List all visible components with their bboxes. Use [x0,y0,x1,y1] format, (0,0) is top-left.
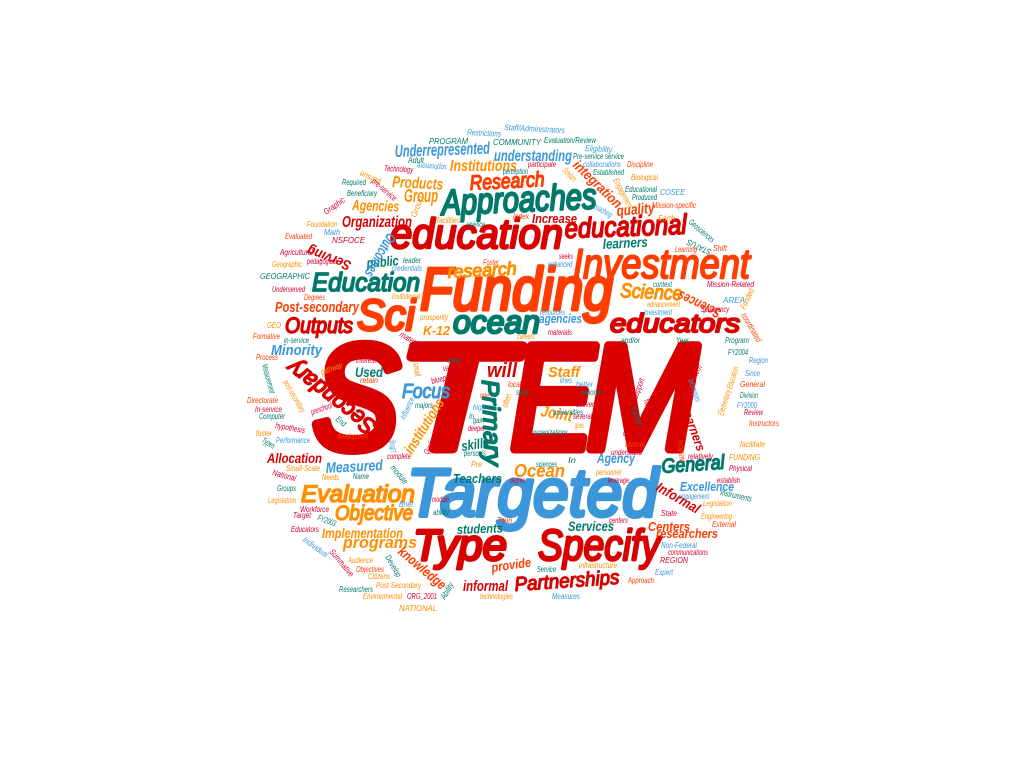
small words: top: Graphic [321,194,347,217]
small words: middle left: Legislation [268,495,296,505]
small words: top: Earth [658,213,675,223]
small words: middle left: often [499,392,514,409]
small words: top: Biological [631,172,659,182]
small words: middle left: Name [353,471,369,481]
word: educational: educational [564,209,688,244]
small words: top: Geosciences [687,217,717,245]
medium words: students [457,520,503,537]
small words: middle right: national [580,387,603,397]
small words: middle right: Region [749,355,768,365]
small words: middle right: better [576,379,594,389]
small words: middle right: FY2004 [728,347,748,357]
small words: top: sophomore [416,161,447,173]
small words: middle left: Groups [277,483,297,493]
small words: middle right: capacity [623,428,646,438]
small words: middle left: module [388,463,410,486]
small words: top: Technology [384,163,414,175]
medium words: Organization [342,214,412,231]
small words: bottom: Develop [383,553,404,579]
small words: top: Staff/Administrators [504,122,566,135]
small words: middle left: post-secondary [281,377,308,415]
small words: top [285,122,728,257]
small words: bottom: Objectives [356,564,385,574]
small words: middle right: advancement [647,299,680,309]
small words: middle left: Underserved [272,284,305,294]
small words: middle right: relatively [688,451,714,461]
medium words: Outcomes [361,230,399,280]
small words: top: Mission-specific [652,200,697,210]
small words: bottom: Train [497,515,512,525]
small words: middle right: Year [676,335,690,345]
small words: middle right: coordinated [739,311,764,344]
small words: middle left: foster [256,428,273,438]
small words: bottom: communications [668,547,708,557]
small words: middle right: leverage [608,475,629,485]
word: STEM: T [395,313,523,481]
medium words [266,139,734,595]
small words: middle left: Pre [471,459,482,469]
small words: top: Restrictions [467,127,502,139]
small words: middle left: one [480,390,489,400]
small words: middle left: Computer [259,411,286,421]
word: Education: Education [312,267,420,297]
small words: middle right: proposal [629,404,646,427]
small words: top: Discipline [627,159,653,169]
small words: middle left: leader [403,255,422,265]
small words: middle right: AREA [722,295,745,305]
small words: middle left: local [508,379,522,389]
small words: bottom: Summative [327,547,356,579]
small words: top: Adult [407,155,425,165]
small words: middle left: National [271,467,298,483]
medium words: will [487,360,517,382]
small words: middle right: Legislation [703,498,732,508]
word: research: research [447,258,517,282]
small words: middle left: pedagogical [306,256,338,266]
small words: bottom: Educators [291,524,320,534]
small words: middle right: understand [611,447,642,457]
small words: middle right: state [516,387,529,397]
small words: middle left: GEO [267,320,281,330]
small words: bottom: Post-Secondary [376,580,422,590]
word: STEM: M [586,313,698,481]
word: STEM: S [312,313,400,481]
word: Objective: Objective [335,502,413,525]
small words: middle right: Review [744,407,764,417]
small words: bottom: Approach [627,575,654,585]
small words: middle right: Elementary Education [715,365,741,417]
small words: bottom: Individual [301,534,331,560]
word: Focus: Focus [402,381,450,403]
small words: bottom: REGION [660,555,689,565]
small words: top: participate [527,159,556,169]
small words: middle right: deliver [576,399,595,409]
medium words: Post-secondary [275,299,359,316]
small words: middle right: Program [725,335,749,345]
small words: middle left: value [443,363,457,373]
medium words: Agency [596,450,636,466]
small words: top: NSFOCE [332,235,365,245]
word: Partnerships: Partnerships [514,567,620,596]
medium words: Serving [304,243,353,274]
small words: middle left: development [337,431,368,441]
small words: middle right: facilitate [740,439,765,449]
small words: middle right: In [568,455,576,465]
word: Specify: Specify [538,521,663,570]
small words: bottom: State [661,508,677,518]
small words: middle left: Geographic [272,259,303,269]
small words: middle left: majors [415,400,434,410]
small words: top: science [467,219,485,229]
small words: top: STATUS [685,237,713,257]
medium words: Measured [325,457,384,477]
word: Targeted: Targeted [407,455,660,531]
medium words: Underrepresented [394,139,490,161]
small words: top: Learning [675,244,697,254]
small words: middle right: group [557,352,572,362]
small words: middle left: In [469,411,474,421]
small words: bottom: Expert [655,567,673,577]
word: Secondary: Secondary [280,354,381,441]
small words: top: Math [324,227,340,237]
small words: middle right: Mission-Related [707,279,754,289]
small words: bottom: ability [433,507,450,517]
small words: middle right: degree [510,475,525,485]
small words: middle right: techniques [686,377,704,404]
small words: middle left: Foster [483,257,500,267]
small words: top: Scholars [561,165,579,184]
medium words: programs [342,533,417,552]
small words: middle right: personnel [595,467,622,477]
small words: middle left: influence [398,396,417,421]
small words: middle right: lines [560,375,573,385]
medium words: Allocation [266,450,322,466]
word: Funding: Funding [420,256,613,323]
medium words: agencies [539,311,582,326]
word: STEM [312,313,698,481]
small words: top: Beneficiary [347,188,378,198]
word: ocean: ocean [453,304,540,340]
medium words: quality [616,200,656,220]
small words: bottom: External [712,519,737,529]
small words: middle right: resources [540,307,565,317]
small words: middle left: deeper [468,423,486,433]
medium words: Centers [648,519,690,534]
small words: top: pre-service [369,175,399,203]
medium words: Products [392,174,444,194]
small words: top: Eligibility [585,143,613,154]
word: Outputs: Outputs [285,313,353,338]
small words: middle right: seeks [559,251,573,261]
medium words: Staff [548,364,582,381]
small words: top: Educational [625,184,658,194]
small words: bottom: technologies [480,591,514,601]
medium words: knowledge [395,543,450,593]
small words: middle left [247,247,522,509]
small words: middle left: GEOGRAPHIC [260,271,311,281]
small words: middle right: several [573,411,593,421]
small words: middle left: Needs [322,472,340,482]
small words: middle left: credentials [392,263,423,273]
medium words: provide [489,555,532,575]
small words: middle left: Brief [399,499,414,509]
word: Primary: Primary [476,379,506,468]
largest words [280,168,752,596]
small words: middle right: Since [745,368,760,378]
medium words: skills [460,434,490,454]
word: Approaches: Approaches [439,175,597,223]
small words: bottom [291,504,737,613]
small words: top: PROGRAM [429,136,469,146]
small words: top: Pre-service service [573,151,624,161]
medium words: Group [404,186,438,206]
medium words: Informal [654,479,704,517]
medium words: Agencies [351,197,399,216]
small words: middle right: Division [740,390,758,400]
small words: top: Required [342,177,366,187]
small words: bottom: Citizens [368,571,391,581]
small words: middle right: General [740,379,766,389]
small words: middle right: Instruments [720,487,753,504]
small words: middle left: Degrees [304,292,325,302]
medium words: Implementation [322,525,403,541]
small words: middle right: context [653,279,672,289]
word: STEM: E [510,313,597,481]
small words: bottom: infrastructure [579,560,617,570]
small words: bottom: Non-Federal [661,540,698,550]
small words: middle left: enter [447,355,462,365]
small words: middle right: FY2000 [737,400,757,410]
small words: middle right: Number [641,397,660,420]
small words: middle right: sciences [536,459,557,469]
small words: bottom: Engineering [701,511,732,521]
small words: top: facilities [437,215,461,225]
small words: bottom: centers [609,515,629,525]
small words: middle right: engagement [679,491,709,501]
small words: top: Produced [632,192,657,202]
small words: middle left: Agricultural [279,247,314,257]
small words: middle right [510,251,780,508]
word: Investment: Investment [573,240,752,287]
small words: middle left: module [432,494,449,504]
medium words: Joint [539,403,574,426]
medium words: Ocean [514,461,565,481]
small words: top: perception [502,166,528,176]
small words: middle left: Quality [421,437,438,456]
small words: middle left: hypothesis [275,420,306,435]
word: Type: Type [413,521,507,570]
medium words: Teachers [453,471,502,486]
small words: middle left: Performance [276,435,310,445]
small words: middle left: interest [356,355,376,365]
small words: middle right: recognized [676,439,688,462]
small words: middle left: small [411,362,423,378]
medium words: Services [568,518,614,534]
medium words: Institutions [450,158,517,175]
small words: bottom: NATIONAL [399,603,437,613]
small words: middle left: material [398,329,425,350]
medium words: understanding [494,148,572,165]
small words: top: COSEE [660,187,685,197]
small words: middle right: FUNDING [729,452,760,462]
small words: top: Established [593,167,624,177]
small words: middle right: Instructors [749,418,780,428]
medium words: Minority [271,342,323,359]
medium words: public [365,252,399,271]
small words: middle left: Directorate [247,395,278,405]
small words: top: Engagement [611,176,636,210]
small words: top: Evaluated [285,231,312,241]
small words: middle left: in-service [284,335,309,345]
medium words: learners [602,234,648,252]
small words: bottom: Target [293,510,311,520]
word: education: education [390,210,563,257]
small words: middle left: retain [360,375,378,385]
small words: middle right: Stem [688,363,704,381]
small words: top: coaching [592,201,614,220]
medium words: integration [570,157,626,211]
small words: bottom: Audience [347,555,373,565]
small words: middle right: goes [575,420,584,430]
small words: bottom: Service [537,564,556,574]
medium words: researchers [656,526,718,541]
small words: middle right: universities [553,407,584,417]
small words: middle left: Lifting [386,440,398,453]
small words: top: Evaluation/Review [544,135,597,145]
small words: middle right: careers [517,331,535,341]
small words: middle right: enhanced [548,259,572,269]
small words: middle right: investment [644,307,672,317]
small words: middle left: gain [473,415,484,425]
small words: bottom: Researchers [339,584,374,594]
medium words: informal [463,578,509,595]
small words: middle left: Formative [253,331,280,341]
small words: middle right: advanced [625,439,645,449]
small words: top: collaborations [583,159,622,169]
small words: middle right: Physical [729,463,753,473]
small words: middle left: complete [387,451,411,461]
small words: top: pursue [357,169,383,188]
small words: middle right: Funded [738,287,756,311]
word: Research: Research [469,168,545,195]
small words: middle left: blueprint [430,370,456,386]
small words: top: Foundation [307,219,337,229]
small words: middle left: Measurement [260,363,278,395]
small words: top: Index [513,211,530,221]
small words: middle left: prosperity [419,312,449,322]
small words: bottom: Workforce [300,504,329,514]
small words: middle right: materials [548,327,573,337]
medium words: Sciences [675,288,723,322]
medium words: Excellence [680,479,734,494]
small words: middle left: Institutional [392,291,421,301]
small words: bottom: FY2003 [316,512,338,528]
small words: bottom: Environmental [363,591,403,601]
small words: bottom: Ability [438,580,456,602]
small words: top: COMMUNITY [493,137,542,147]
small words: middle left: person's [463,448,487,458]
medium words: institutions [401,396,448,457]
small words: middle left: Types [260,435,278,451]
small words: middle right: and/or [621,335,641,345]
small words: top: Group [408,194,425,219]
small words: middle left: Small-Scale [286,463,320,473]
small words: top: Shift [713,243,728,253]
word: Sci: Sci [357,291,416,340]
small words: middle left: Process [256,352,279,362]
small words: middle left: In-service [255,404,282,414]
small words: middle left: preschool [309,400,334,417]
small words: middle right: Support [629,376,647,401]
medium words: K-12 [423,323,451,338]
small words: middle right: Subagency [701,304,729,314]
small words: middle left: pathway [319,360,344,377]
word: General: General [661,452,726,478]
word: Science: Science [620,280,683,305]
small words: bottom: ORG_2001 [407,591,437,601]
medium words: Learners [678,403,709,453]
small words: bottom: Measures [552,591,581,601]
small words: middle right: establish [717,475,740,485]
medium words: Used [355,364,383,380]
small words: middle left: high [473,402,485,412]
word: educators: educators [610,308,740,338]
small words: middle right: organizations [533,427,569,437]
small words: middle left: End [334,414,349,429]
medium words: Increase [532,211,577,226]
word: Evaluation: Evaluation [301,481,415,508]
